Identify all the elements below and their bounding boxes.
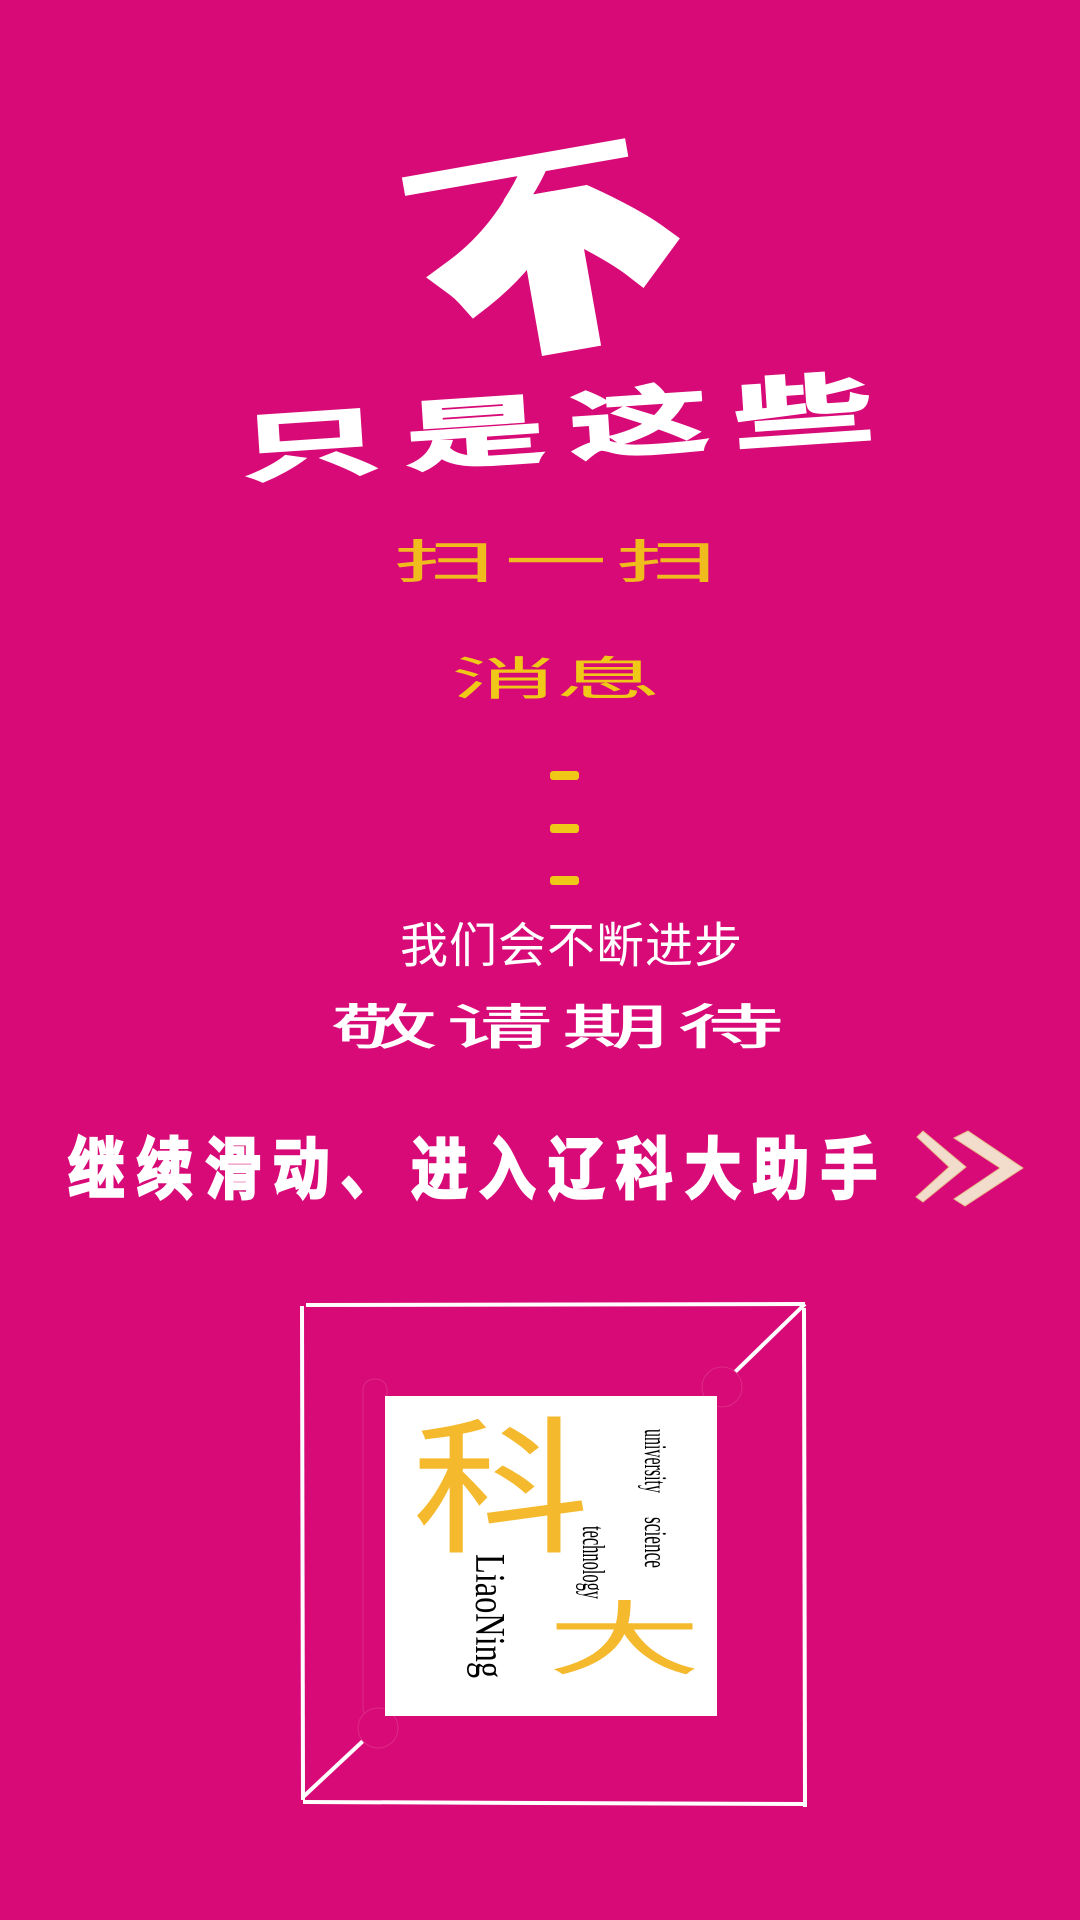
heading: message: 消息 [451,654,661,705]
white square [385,1396,717,1716]
logo panel [385,1396,717,1716]
call to action: keep sliding: 继续滑动、进入辽科大助手 [68,1134,877,1208]
text: please look forward: 敬请期待 [331,1000,784,1054]
text: we keep improving: 我们会不断进步 [400,920,742,973]
label university: university [638,1429,674,1493]
title: big slanted character: 不 [430,111,675,376]
label science: science [638,1517,674,1568]
label technology: technology [576,1526,612,1599]
logo character ke: 科 [412,1407,590,1573]
title: only these: 只是这些 [237,366,876,492]
faint decorative bar and knobs [358,1367,742,1748]
title: big slanted character: 不 [381,109,677,384]
logo character da: 大 [547,1595,701,1686]
ellipsis dashes [550,771,579,885]
heading: scan: 扫一扫 [394,536,717,588]
logo frame [302,1304,806,1807]
icon: double chevron arrow [916,1131,1023,1206]
label LiaoNing: LiaoNing [466,1554,512,1678]
